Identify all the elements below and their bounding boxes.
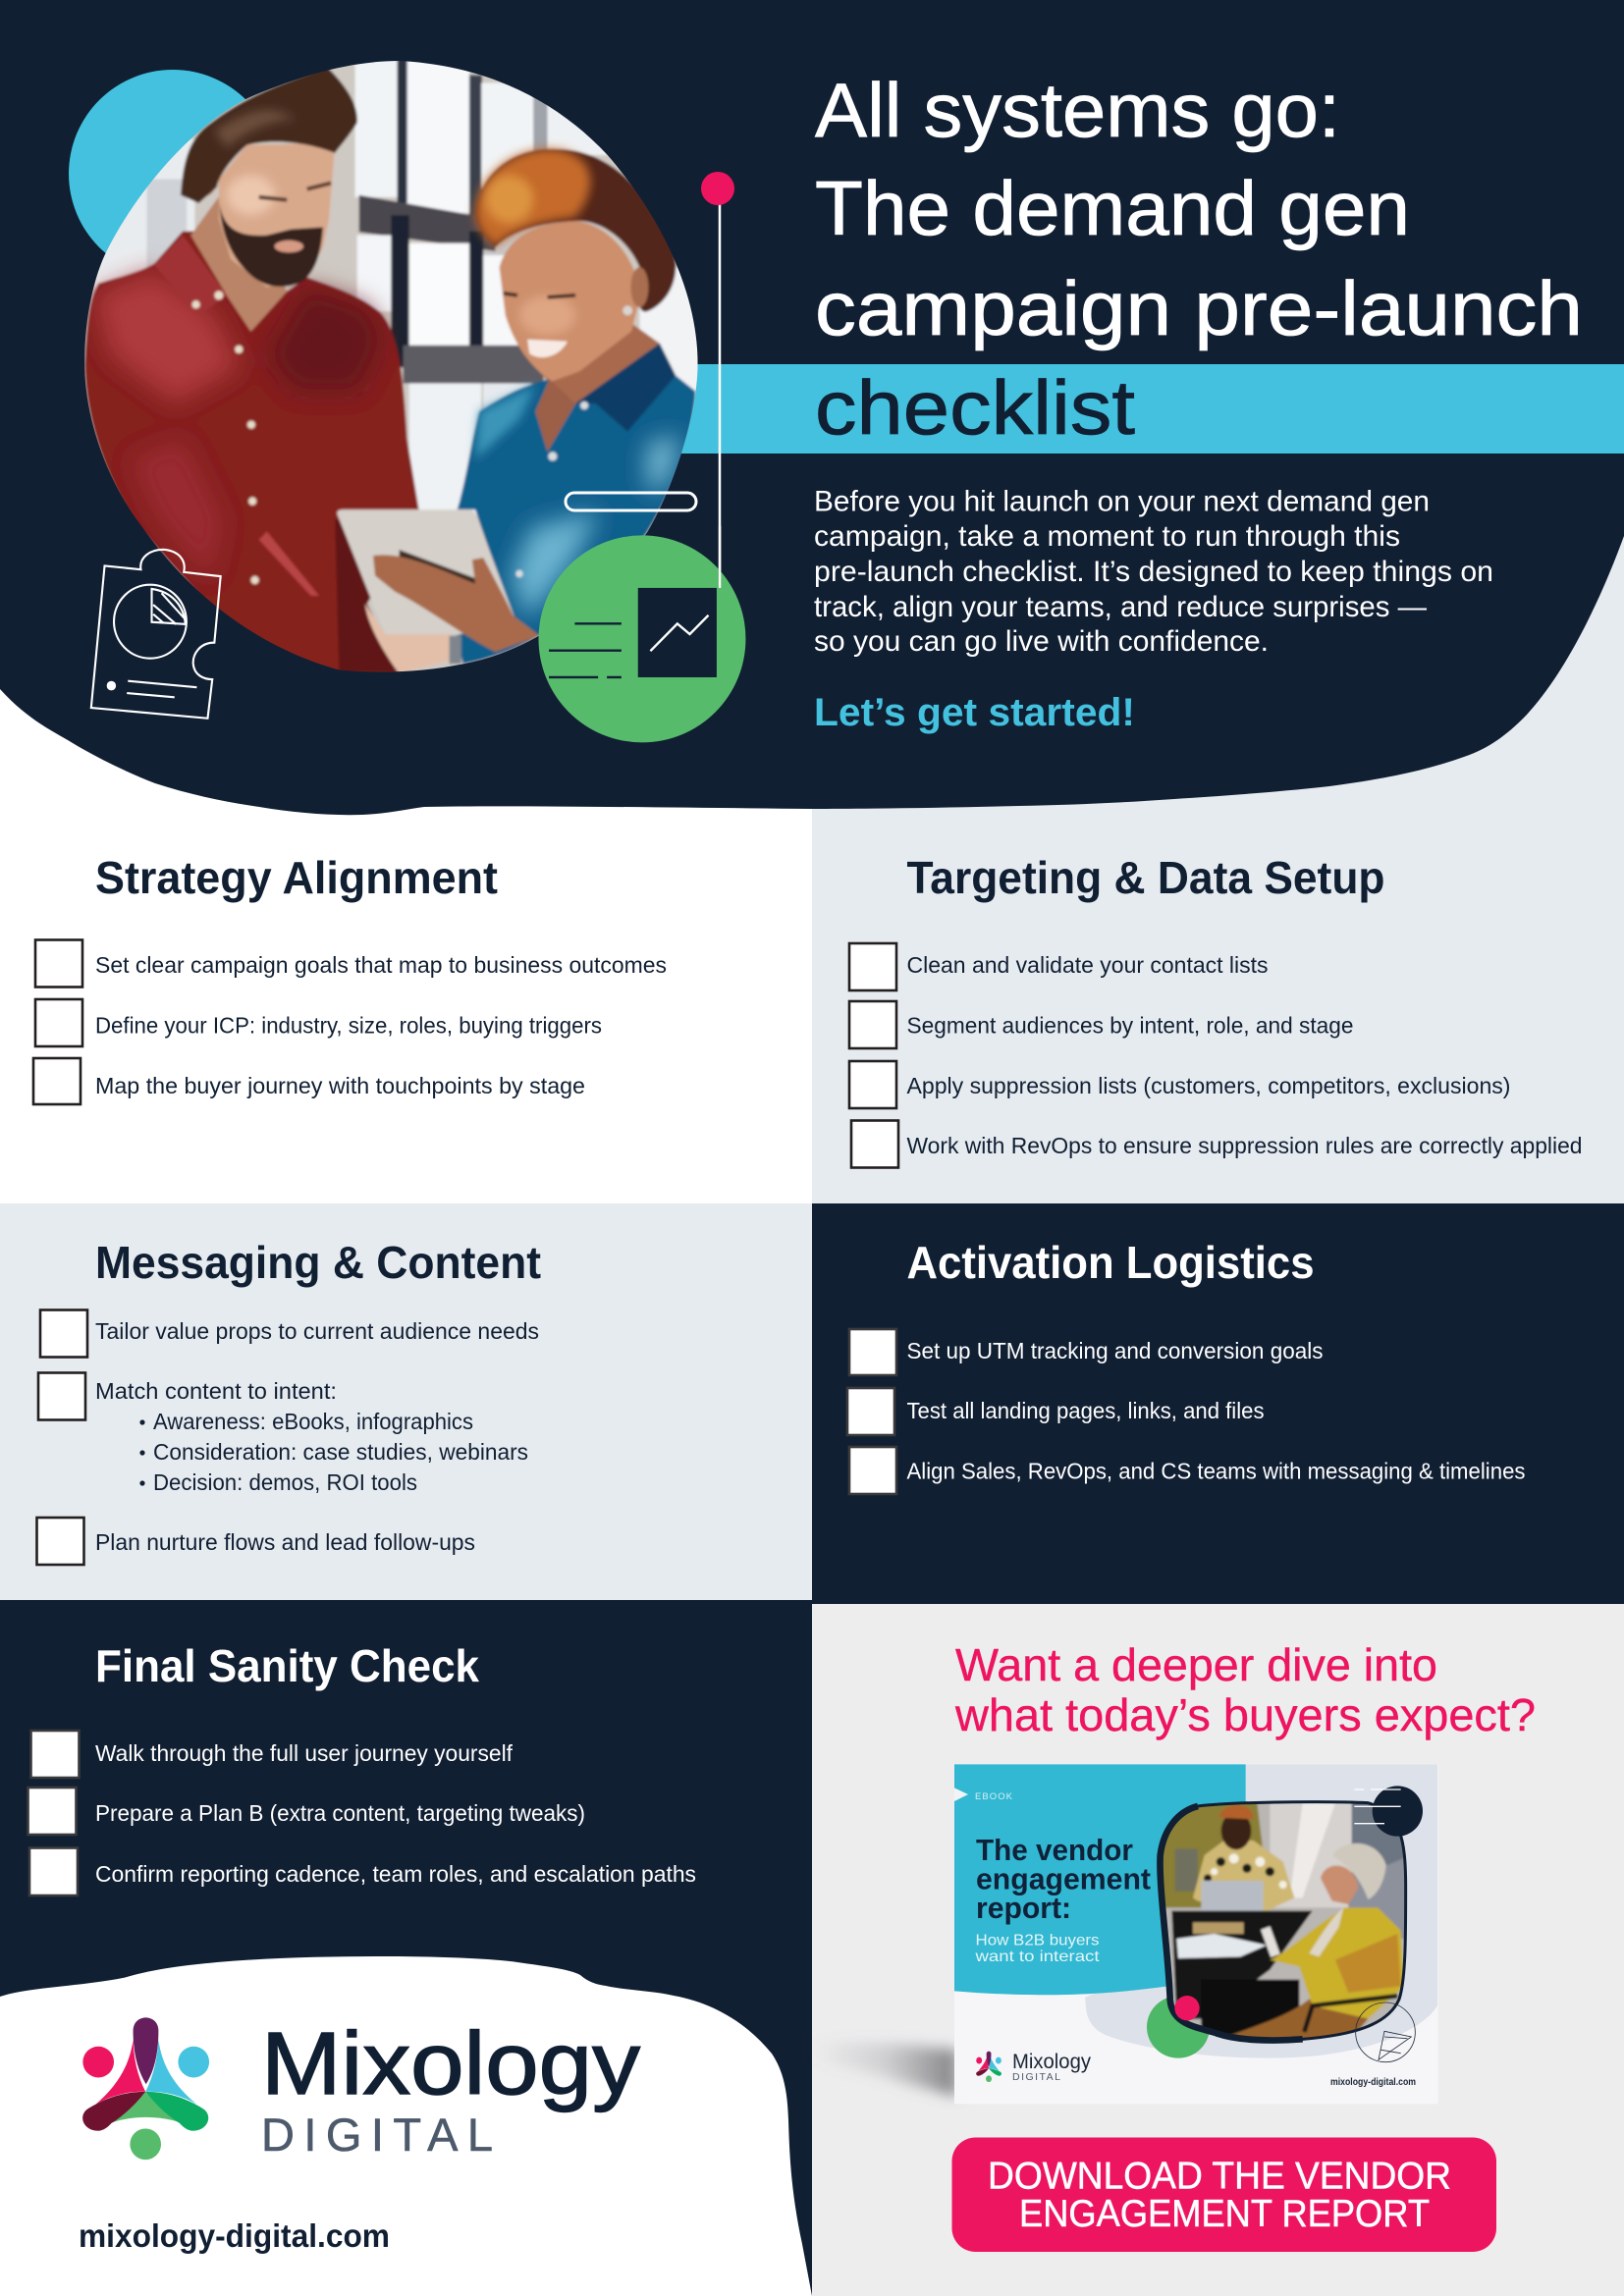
logo mark xyxy=(82,2017,209,2160)
heading: Final Sanity Check xyxy=(95,1640,479,1691)
icon: puzzle piece with pie chart xyxy=(91,550,221,719)
panel: Final Sanity Check: Walk through the full user journey yourself xyxy=(95,1740,513,1766)
intro paragraph: Before you hit launch on your next demand gen xyxy=(814,485,1430,518)
panel: Activation Logistics: Test all landing pages, links, and files xyxy=(907,1398,1265,1423)
panel: Final Sanity Check: Prepare a Plan B (extra content, targeting tweaks) xyxy=(95,1800,585,1826)
ebook subtitle xyxy=(974,1932,1100,1965)
heading: Messaging & Content xyxy=(95,1237,541,1288)
logo wordmark: Mixology xyxy=(261,2015,640,2113)
panel: Strategy Alignment: Define your ICP: industry, size, roles, buying triggers xyxy=(95,1013,602,1039)
panel: Activation Logistics: Set up UTM tracking and conversion goals xyxy=(907,1338,1324,1363)
heading: Targeting & Data Setup xyxy=(907,852,1384,903)
ebook subtitle: How B2B buyers xyxy=(976,1932,1100,1949)
intro paragraph: campaign, take a moment to run through this xyxy=(814,520,1400,553)
panel: Targeting & Data Setup: Clean and validate your contact lists xyxy=(907,952,1269,978)
panel: Targeting & Data Setup: Apply suppression lists (customers, competitors, exclusions) xyxy=(907,1073,1510,1098)
title xyxy=(815,67,1583,451)
panel: Targeting & Data Setup: Work with RevOps to ensure suppression rules are correctly applied xyxy=(907,1133,1583,1158)
panel: Final Sanity Check: Confirm reporting cadence, team roles, and escalation paths xyxy=(95,1861,696,1887)
ebook logo text: DIGITAL xyxy=(1012,2071,1060,2083)
hero navy background shape xyxy=(0,0,1624,815)
woman: neck xyxy=(539,323,660,403)
download button: DOWNLOAD THE VENDOR xyxy=(988,2156,1451,2197)
man: face xyxy=(219,143,335,288)
intro paragraph: track, align your teams, and reduce surprises — xyxy=(814,591,1427,623)
right panel heading: Want a deeper dive into xyxy=(955,1639,1437,1690)
call to start: Let’s get started! xyxy=(814,691,1135,734)
intro paragraph: so you can go live with confidence. xyxy=(814,625,1269,658)
woman: shirt xyxy=(456,344,696,664)
logo wordmark: DIGITAL xyxy=(261,2109,493,2161)
man: shirt xyxy=(84,232,419,676)
right panel heading xyxy=(954,1639,1536,1740)
title: The demand gen xyxy=(815,165,1410,251)
intro paragraph: pre-launch checklist. It’s designed to keep things on xyxy=(814,556,1493,588)
book shadow xyxy=(812,2043,957,2097)
panel: Activation Logistics xyxy=(847,1237,1526,1494)
panel: Targeting & Data Setup: Segment audiences by intent, role, and stage xyxy=(907,1013,1353,1039)
download button: ENGAGEMENT REPORT xyxy=(1019,2193,1430,2235)
ebook title xyxy=(976,1833,1151,1925)
intro paragraph xyxy=(814,485,1493,658)
panel: Targeting & Data Setup xyxy=(849,852,1583,1168)
download button xyxy=(952,2138,1496,2252)
ebook logo text: Mixology xyxy=(1012,2051,1091,2073)
website url: mixology-digital.com xyxy=(79,2217,390,2254)
panel: Messaging & Content: Match content to intent: xyxy=(95,1378,337,1404)
ebook title: engagement xyxy=(976,1861,1151,1896)
cyan circle behind photo xyxy=(69,70,277,278)
panel: Messaging & Content: Plan nurture flows and lead follow-ups xyxy=(95,1529,475,1555)
cyan title band xyxy=(677,364,1624,454)
title: checklist xyxy=(815,364,1135,451)
hands xyxy=(373,555,539,652)
ebook title: The vendor xyxy=(976,1833,1133,1867)
woman: face xyxy=(500,221,639,382)
right panel heading: what today’s buyers expect? xyxy=(954,1689,1536,1740)
title: campaign pre-launch xyxy=(815,265,1583,351)
ebook logo text xyxy=(1012,2051,1091,2083)
panel: Strategy Alignment: Set clear campaign goals that map to business outcomes xyxy=(95,952,667,978)
white pill outline xyxy=(566,493,696,510)
panel: Strategy Alignment: Map the buyer journey with touchpoints by stage xyxy=(95,1073,585,1098)
ebook title: report: xyxy=(976,1891,1071,1925)
panel: Messaging & Content: Tailor value props to current audience needs xyxy=(95,1318,539,1344)
logo wordmark xyxy=(261,2015,640,2161)
decorative vertical line with pink dot xyxy=(701,172,734,589)
panel: Messaging & Content xyxy=(37,1237,541,1565)
ebook url: mixology-digital.com xyxy=(1330,2077,1416,2088)
woman: hair xyxy=(475,149,676,312)
icon: green circle with chart xyxy=(538,526,745,742)
panel: Activation Logistics: Align Sales, RevOps, and CS teams with messaging & timelines xyxy=(907,1459,1526,1484)
hero photo: colleagues with tablet xyxy=(79,59,720,700)
heading: Strategy Alignment xyxy=(95,852,498,903)
panel: Final Sanity Check xyxy=(27,1640,696,1896)
man: hair xyxy=(181,67,357,203)
panel: Messaging & Content: Awareness: eBooks, infographics xyxy=(153,1409,473,1434)
panel: Messaging & Content: Consideration: case studies, webinars xyxy=(153,1439,528,1465)
man: beard xyxy=(220,203,323,287)
white logo blob xyxy=(0,1956,812,2296)
tablet xyxy=(335,507,516,616)
panel: Strategy Alignment xyxy=(33,852,667,1104)
title: All systems go: xyxy=(815,67,1340,153)
panel: Messaging & Content: Decision: demos, ROI tools xyxy=(153,1469,417,1495)
ebook cover xyxy=(812,1764,1438,2104)
ebook label: EBOOK xyxy=(975,1791,1013,1802)
shirt buttons xyxy=(192,291,259,584)
ebook subtitle: want to interact xyxy=(974,1949,1100,1965)
man: neck xyxy=(190,191,287,332)
heading: Activation Logistics xyxy=(907,1237,1314,1288)
